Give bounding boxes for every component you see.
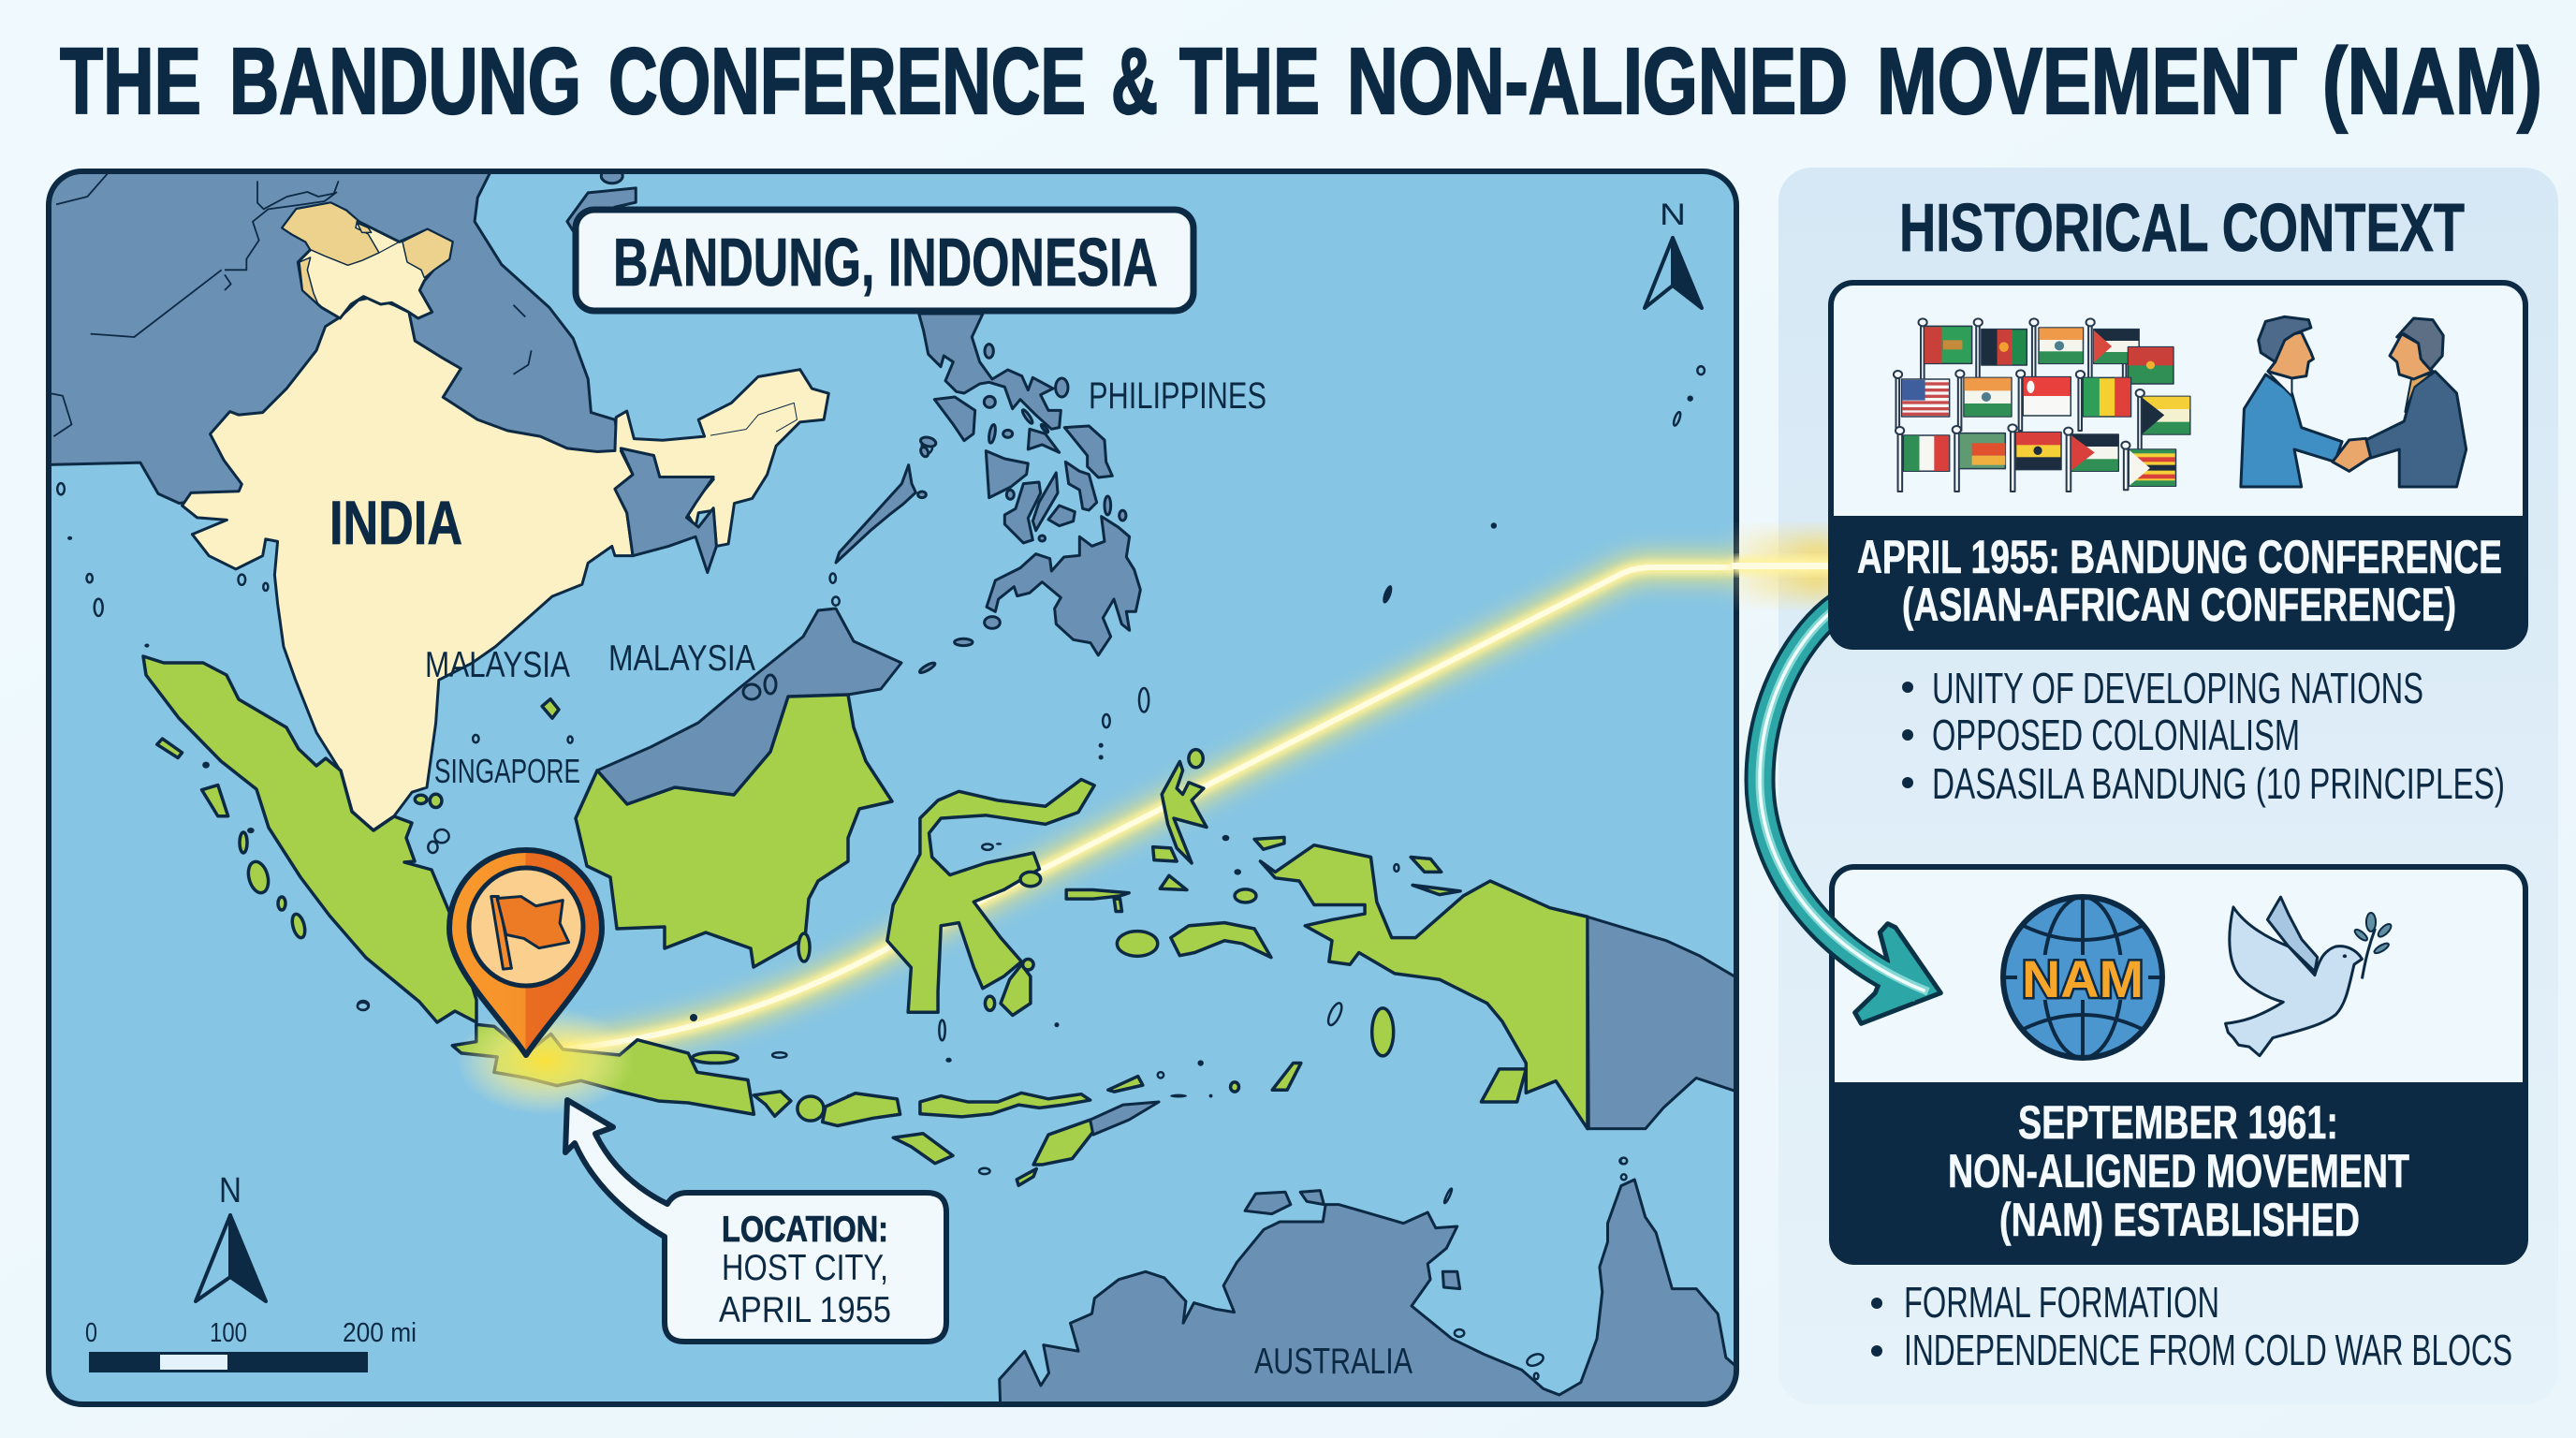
map label: Singapore: SINGAPORE [434, 752, 580, 790]
land: South Asia and neighbours [36, 150, 932, 853]
callout: host city location with arrow: APRIL 1955 [719, 1290, 891, 1330]
scale bar: 200 mi [343, 1318, 417, 1348]
land: Sumatra and Borneo [143, 609, 901, 1022]
compass: top right [1645, 198, 1702, 308]
title: THE [1179, 29, 1320, 134]
Bandung location glow on Java [459, 1011, 629, 1112]
Bangladesh [615, 448, 716, 573]
row 1 flags [1925, 326, 1972, 363]
title: MOVEMENT [1877, 29, 2297, 134]
right man [2366, 372, 2466, 487]
Kashmir region [283, 203, 452, 318]
land: Sulawesi, Moluccas, Lesser Sunda, New Guinea [837, 366, 1749, 1185]
callout: host city location with arrow: LOCATION: [722, 1210, 888, 1250]
row 3 poles [1898, 433, 1902, 492]
land: Australia [1000, 1158, 1752, 1411]
list: Bandung conference points [1902, 664, 2505, 808]
card: September 1961 NAM established: SEPTEMBER 1961: [2018, 1096, 2338, 1149]
New Guinea, Indonesian part [1260, 845, 1588, 1129]
title: & [1111, 29, 1158, 134]
list: NAM points: FORMAL FORMATION [1904, 1278, 2219, 1327]
icon: flag in pin [491, 897, 569, 969]
compass: bottom left [196, 1171, 266, 1301]
map label: Malaysia on India: MALAYSIA [425, 645, 570, 685]
land: Philippines [836, 314, 1140, 674]
title: NON-ALIGNED [1347, 29, 1848, 134]
India [183, 297, 828, 830]
compass: bottom left: N [219, 1171, 242, 1211]
card: September 1961 NAM established [1832, 867, 2525, 1262]
list: NAM points [1871, 1278, 2512, 1374]
row 2 flags [1902, 379, 1950, 417]
panel: map [36, 138, 1752, 1411]
card: April 1955 Bandung Conference [1831, 283, 2525, 647]
icon: group of national flags [1894, 318, 2190, 492]
title: CONFERENCE [608, 29, 1086, 134]
callout: host city location with arrow [565, 1100, 946, 1342]
icon: two men shaking hands [2241, 316, 2466, 487]
title: BANDUNG [229, 29, 581, 134]
land: northern borders [56, 174, 454, 338]
sea [49, 171, 1736, 1404]
hands [2333, 438, 2371, 471]
Sulawesi [887, 780, 1094, 1012]
compass: top right: N [1660, 198, 1686, 231]
scale bar: 0 [85, 1318, 97, 1348]
map title box: Bandung, Indonesia: BANDUNG, INDONESIA [613, 226, 1158, 301]
scale bar: 100 [210, 1318, 247, 1348]
icon: peace dove with olive branch [2226, 897, 2393, 1056]
Papua New Guinea [1588, 917, 1749, 1129]
card: September 1961 NAM established: NAM [2022, 949, 2144, 1008]
map label: Philippines: PHILIPPINES [1089, 375, 1266, 417]
panel: historical context background [1778, 168, 2558, 1404]
map frame [49, 171, 1736, 1404]
map label: India: INDIA [329, 488, 462, 557]
row 3 flags [1904, 435, 1950, 471]
card: September 1961 NAM established: NON-ALIGNED MOVEMENT [1948, 1145, 2409, 1197]
icon: location pin [449, 850, 602, 1055]
card: September 1961 NAM established: (NAM) ESTABLISHED [1999, 1194, 2360, 1246]
route glow joining map to conference card [1732, 536, 1835, 597]
title [60, 29, 2542, 134]
left man [2241, 374, 2342, 487]
title: THE [60, 29, 201, 134]
Halmahera [1162, 761, 1207, 863]
list: Bandung conference points: OPPOSED COLONIALISM [1932, 711, 2300, 759]
map label: Australia: AUSTRALIA [1254, 1342, 1412, 1382]
row 2 poles [1896, 376, 1899, 429]
island: land behind title box [567, 188, 636, 231]
glowing route from Bandung to conference card [552, 567, 1741, 1050]
callout: host city location with arrow: HOST CITY, [722, 1248, 888, 1288]
Lesser Sunda islands [920, 1093, 1090, 1117]
scale bar [85, 1318, 417, 1372]
arrow: from Bandung Conference to NAM [1760, 602, 1940, 1023]
land: Java and Bali [358, 1003, 900, 1125]
small islands [57, 483, 65, 494]
map title box: Bandung, Indonesia [576, 210, 1193, 311]
map label: Malaysia: MALAYSIA [608, 638, 755, 679]
icon: NAM globe [2003, 897, 2162, 1058]
